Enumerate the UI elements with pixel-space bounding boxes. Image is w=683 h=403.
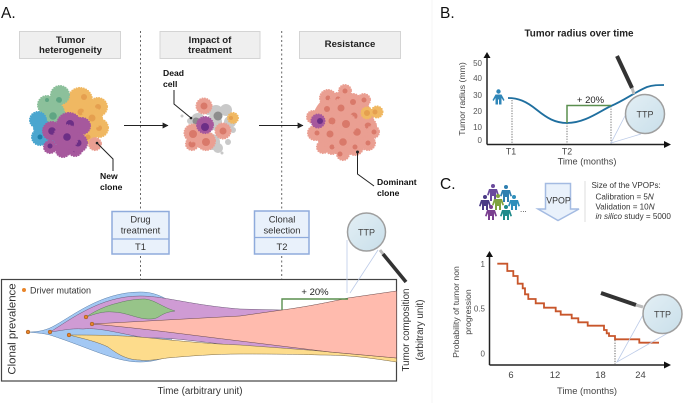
label: new clone xyxy=(96,142,123,192)
y ticks xyxy=(474,260,486,358)
chart title: Tumor radius over time xyxy=(524,28,634,40)
label: new clone: clone xyxy=(100,182,123,192)
callout: drug treatment T1 xyxy=(112,212,169,254)
x labels: T1 xyxy=(506,146,516,156)
y ticks: 0 xyxy=(478,136,483,145)
x axis label: time arbitrary unit: Time (arbitrary unit) xyxy=(157,386,243,397)
icon: magnifier TTP xyxy=(611,56,664,143)
x ticks: 18 xyxy=(595,369,606,380)
y ticks: 50 xyxy=(473,59,483,68)
tumor curve xyxy=(508,85,664,123)
y axis label: Probability of tumor non xyxy=(451,266,461,358)
text block: VPOP sizes: Validation = 10N xyxy=(596,202,655,212)
x labels: T2 xyxy=(562,146,572,156)
label: dead cell: cell xyxy=(163,79,177,89)
y ticks: 40 xyxy=(473,74,483,83)
survival curve xyxy=(497,264,659,343)
legend: driver mutation: Driver mutation xyxy=(30,286,91,296)
x labels: Time (months) xyxy=(558,156,616,166)
x axis label: Time (months) xyxy=(557,385,617,396)
y ticks: 0 xyxy=(481,350,486,358)
y ticks xyxy=(473,59,483,145)
tumor cluster: resistance xyxy=(307,85,382,160)
bracket: plus 20 percent xyxy=(282,287,348,310)
right axis label: tumor composition: (arbitrary unit) xyxy=(415,300,426,360)
x labels xyxy=(506,146,616,166)
panel label B: B. xyxy=(440,5,455,22)
y ticks: 1 xyxy=(481,260,486,269)
x ticks: 6 xyxy=(508,369,514,380)
heading: impact of treatment: treatment xyxy=(188,45,233,56)
arrow: VPOP: VPOP xyxy=(546,196,571,206)
heading: tumor heterogeneity: Tumor xyxy=(56,35,85,46)
heading: tumor heterogeneity: heterogeneity xyxy=(39,45,103,56)
icon: magnifier TTP: TTP xyxy=(636,110,654,120)
y ticks: 30 xyxy=(473,91,483,100)
heading: impact of treatment: Impact of xyxy=(189,35,232,46)
label: dominant clone: clone xyxy=(377,188,400,198)
tumor cluster: after treatment xyxy=(180,98,238,154)
axes xyxy=(486,251,671,368)
axes xyxy=(484,52,671,148)
bracket: plus 20 percent xyxy=(567,95,611,123)
label: dead cell xyxy=(163,68,192,119)
arrow: VPOP xyxy=(538,184,579,220)
icon: magnifier TTP panel A: TTP xyxy=(358,228,375,238)
heading: tumor heterogeneity xyxy=(20,32,120,58)
callout: clonal selection T2 xyxy=(254,211,309,254)
y axis label xyxy=(451,266,473,358)
label: dominant clone: Dominant xyxy=(377,177,417,187)
y axis label: progression xyxy=(463,289,473,335)
bracket: plus 20 percent: + 20% xyxy=(301,287,329,298)
icon: virtual population: ... xyxy=(520,205,527,214)
icon: magnifier TTP: TTP xyxy=(654,310,671,320)
heading: resistance xyxy=(300,32,400,58)
panel label C: C. xyxy=(440,176,456,193)
arrow: to resistance xyxy=(259,124,303,126)
text block: VPOP sizes: Size of the VPOPs: xyxy=(592,181,661,190)
x ticks: 24 xyxy=(635,369,646,380)
chart: clonal evolution fish plot xyxy=(2,280,396,381)
y ticks: 10 xyxy=(473,123,483,132)
x ticks: 12 xyxy=(550,369,560,380)
icon: virtual population xyxy=(479,184,527,220)
x ticks xyxy=(508,369,646,380)
text block: VPOP sizes xyxy=(592,181,671,221)
panel label A: A. xyxy=(1,5,16,22)
callout: clonal selection T2: Clonal xyxy=(269,214,295,224)
text block: VPOP sizes: in silico study = 5000 xyxy=(596,212,671,221)
y ticks: 0.5 xyxy=(474,304,486,314)
panel B: tumor radius chart xyxy=(457,28,671,166)
dotted guides xyxy=(512,100,611,144)
callout: drug treatment T1: treatment xyxy=(121,224,161,236)
heading: resistance: Resistance xyxy=(325,39,375,50)
dotted guide xyxy=(614,340,616,365)
text block: VPOP sizes: Calibration = 5N xyxy=(596,192,654,202)
driver mutation dots xyxy=(26,315,94,337)
label: new clone: New xyxy=(100,171,118,181)
right axis label: tumor composition: Tumor composition xyxy=(401,289,412,371)
panel C: Kaplan-Meier chart xyxy=(451,251,682,396)
callout: drug treatment T1: T1 xyxy=(135,241,146,252)
heading: impact of treatment xyxy=(160,32,260,58)
callout: clonal selection T2: T2 xyxy=(277,241,287,252)
arrow: to impact of treatment xyxy=(124,124,168,126)
label: dominant clone xyxy=(356,150,417,198)
bracket: plus 20 percent: + 20% xyxy=(577,95,605,106)
icon: magnifier TTP panel A xyxy=(347,213,406,293)
icon: magnifier TTP xyxy=(601,293,682,362)
y ticks: 20 xyxy=(473,107,483,116)
tumor cluster: heterogeneous xyxy=(30,86,108,157)
y axis label: Tumor radius (mm) xyxy=(457,62,467,136)
callout: clonal selection T2: selection xyxy=(263,224,301,236)
callout: drug treatment T1: Drug xyxy=(130,214,151,224)
icon: patient xyxy=(492,89,504,104)
right axis label: tumor composition xyxy=(401,289,426,371)
y axis label: clonal prevalence: Clonal prevalence xyxy=(6,283,18,375)
label: dead cell: Dead xyxy=(163,68,184,78)
